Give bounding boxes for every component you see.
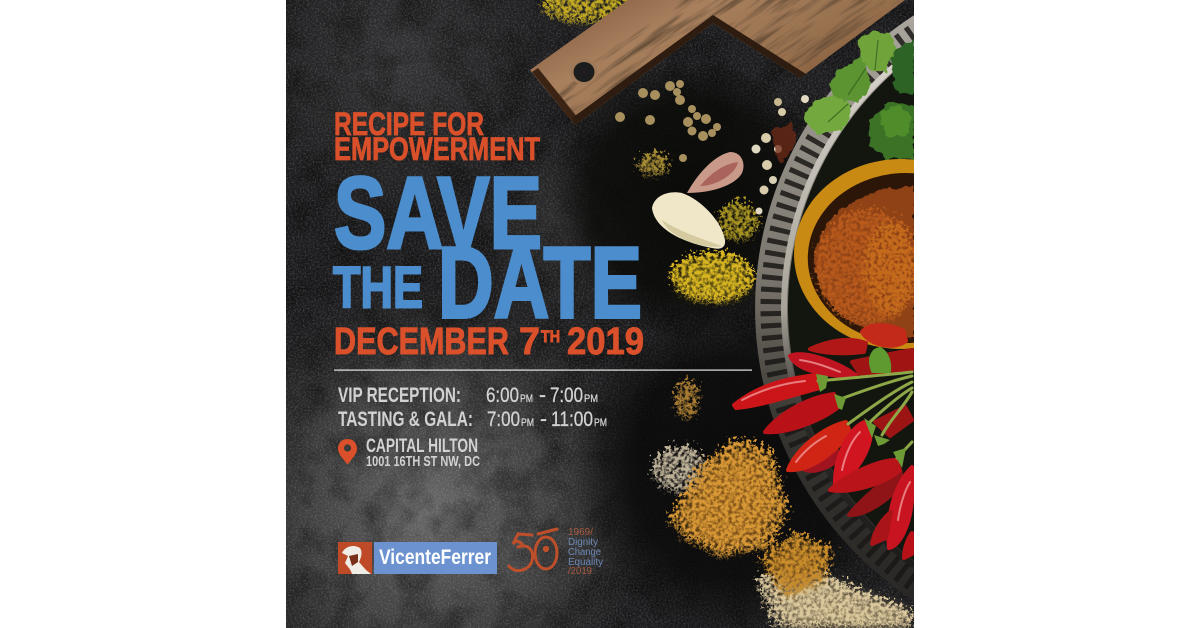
schedule: 7:00 xyxy=(550,384,583,407)
ground spice xyxy=(814,186,914,338)
powder: golden specks xyxy=(675,380,699,420)
chilli: second xyxy=(765,394,840,432)
powder: yellow upper xyxy=(718,202,758,242)
peppercorns xyxy=(615,80,809,214)
chilli: top right xyxy=(862,325,906,346)
powder: golden lower xyxy=(760,532,832,600)
logo portrait mark xyxy=(338,542,372,574)
anniversary tagline: Equality xyxy=(568,557,603,568)
anniversary tagline xyxy=(568,527,603,577)
chilli: dark back ones xyxy=(810,340,866,353)
schedule: PM xyxy=(594,417,607,429)
powder: golden main xyxy=(668,438,788,558)
chilli: central xyxy=(835,422,871,486)
venue: CAPITAL HILTON xyxy=(366,436,478,457)
chilli: long left xyxy=(734,375,820,408)
headline: save the date: SAVE xyxy=(334,156,542,270)
schedule: PM xyxy=(521,417,534,429)
chilli: third xyxy=(788,422,850,470)
headline: save the date: THE xyxy=(333,256,423,320)
schedule: VIP RECEPTION: xyxy=(338,384,461,407)
venue xyxy=(366,436,480,470)
title: recipe for empowerment: EMPOWERMENT xyxy=(334,131,540,167)
schedule xyxy=(338,384,607,431)
garlic: peeled clove xyxy=(652,192,725,249)
anniversary 50 mark xyxy=(509,529,557,571)
anniversary tagline: Change xyxy=(568,547,601,558)
event date: DECEMBER xyxy=(334,321,509,363)
powder: pale bottom right xyxy=(755,560,912,628)
chilli: curved upper xyxy=(790,354,856,376)
powder: pale left xyxy=(653,446,707,494)
event date: 2019 xyxy=(567,321,644,363)
schedule: TASTING & GALA: xyxy=(338,408,473,431)
parsley leaves xyxy=(804,31,914,160)
chilli: lower right xyxy=(889,467,912,548)
anniversary tagline: /2019 xyxy=(568,566,592,577)
title: recipe for empowerment: RECIPE FOR xyxy=(334,106,484,142)
icon: location pin xyxy=(338,439,357,464)
chilli caps xyxy=(816,374,906,468)
event date: 7 xyxy=(519,321,540,363)
red flakes xyxy=(772,122,796,162)
bowl of chilli powder xyxy=(794,159,920,349)
logo: Vicente Ferrer xyxy=(338,542,497,574)
chopping board xyxy=(530,0,905,125)
red chillies xyxy=(734,325,912,558)
logo: 50 years xyxy=(509,527,603,577)
decorative plate xyxy=(755,15,914,601)
chilli highlights xyxy=(742,360,910,520)
schedule: 7:00 xyxy=(487,408,520,431)
title: recipe for empowerment xyxy=(335,112,540,161)
headline: save the date: DATE xyxy=(438,228,642,340)
chilli: lower xyxy=(830,460,900,491)
chilli: green pepper xyxy=(871,349,889,371)
garlic cloves xyxy=(652,152,744,249)
logo wordmark xyxy=(374,542,497,574)
schedule: - xyxy=(539,384,546,407)
infographic canvas xyxy=(286,0,914,628)
powder: ochre small xyxy=(638,153,668,177)
powder: yellow mid xyxy=(671,252,755,304)
schedule: 11:00 xyxy=(551,408,593,431)
event date: TH xyxy=(541,327,560,346)
chilli stems xyxy=(818,372,912,458)
spice powders scattered on the slate xyxy=(543,0,912,628)
schedule: PM xyxy=(584,393,598,405)
schedule: PM xyxy=(520,393,533,405)
schedule: - xyxy=(540,408,547,431)
background: dark slate texture xyxy=(286,0,914,628)
venue: 1001 16TH ST NW, DC xyxy=(366,454,480,470)
event date xyxy=(336,326,644,355)
board hole xyxy=(574,80,580,83)
powder: yellow top xyxy=(543,0,627,24)
garlic: purple skin clove xyxy=(687,152,744,193)
anniversary tagline: 1969/ xyxy=(568,527,593,538)
headline: save the date xyxy=(332,175,640,319)
schedule: 6:00 xyxy=(486,384,519,407)
logo wordmark: VicenteFerrer xyxy=(379,546,491,569)
anniversary tagline: Dignity xyxy=(568,537,598,548)
